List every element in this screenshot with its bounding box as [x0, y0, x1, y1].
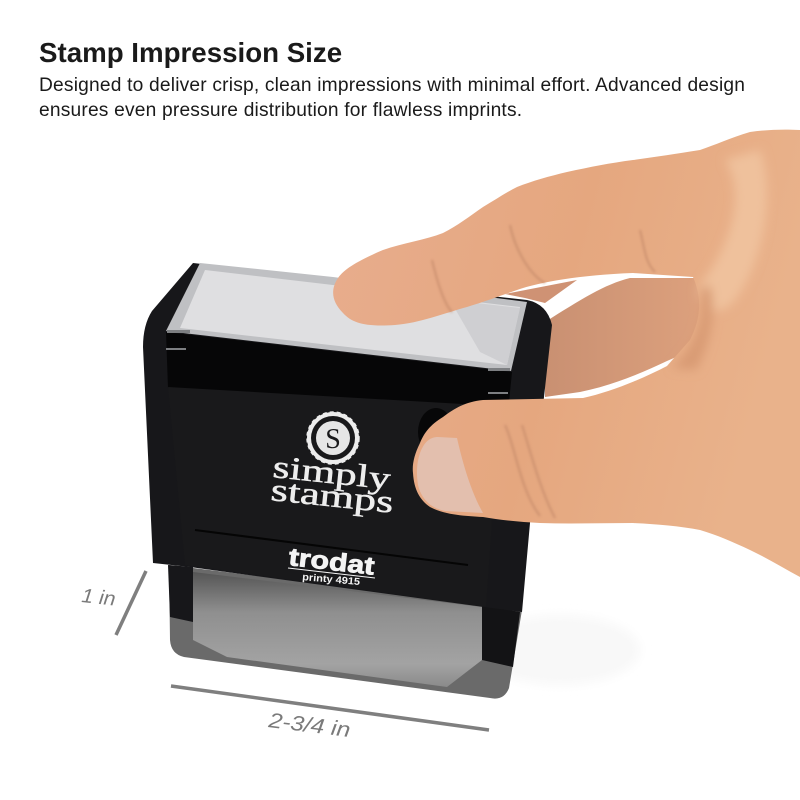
trodat mark: trodat: [287, 543, 377, 581]
description text: Designed to deliver crisp, clean impressions with minimal effort. Advanced design: [39, 75, 745, 96]
dark band under window: [166, 332, 512, 412]
logo badge: [307, 412, 359, 464]
logo badge: S: [325, 424, 341, 455]
black housing: [143, 263, 552, 612]
window label: [180, 270, 520, 365]
brand text: stamps: [269, 471, 395, 520]
description text: ensures even pressure distribution for flawless imprints.: [39, 100, 522, 121]
stamp: [143, 263, 552, 699]
dimension: 2-3/4 in: 2-3/4 in: [266, 709, 352, 742]
front face: [168, 387, 492, 607]
label line: [195, 530, 468, 565]
brand text: [269, 448, 395, 520]
title: Stamp Impression Size: [39, 37, 342, 68]
second finger behind stamp: [505, 278, 715, 397]
dimension: height line: [116, 571, 146, 635]
clear window frame: [166, 263, 527, 371]
hand: index finger, palm and thumb: [333, 130, 800, 577]
hinge clips: [166, 330, 510, 394]
knuckle creases: [432, 225, 655, 518]
brand text: simply: [271, 448, 392, 496]
window reflection: [450, 300, 520, 365]
floor shadow: [480, 615, 640, 685]
thumb shadow on stamp: [418, 408, 454, 456]
clear base: [168, 565, 522, 699]
palm shading: [672, 150, 767, 370]
description text: [39, 75, 745, 121]
trodat mark: [287, 543, 377, 588]
dimension: 1 in: 1 in: [80, 585, 117, 611]
trodat mark: printy 4915: [302, 572, 361, 588]
fingernail: [417, 437, 483, 513]
dimension: width line: [171, 686, 489, 730]
